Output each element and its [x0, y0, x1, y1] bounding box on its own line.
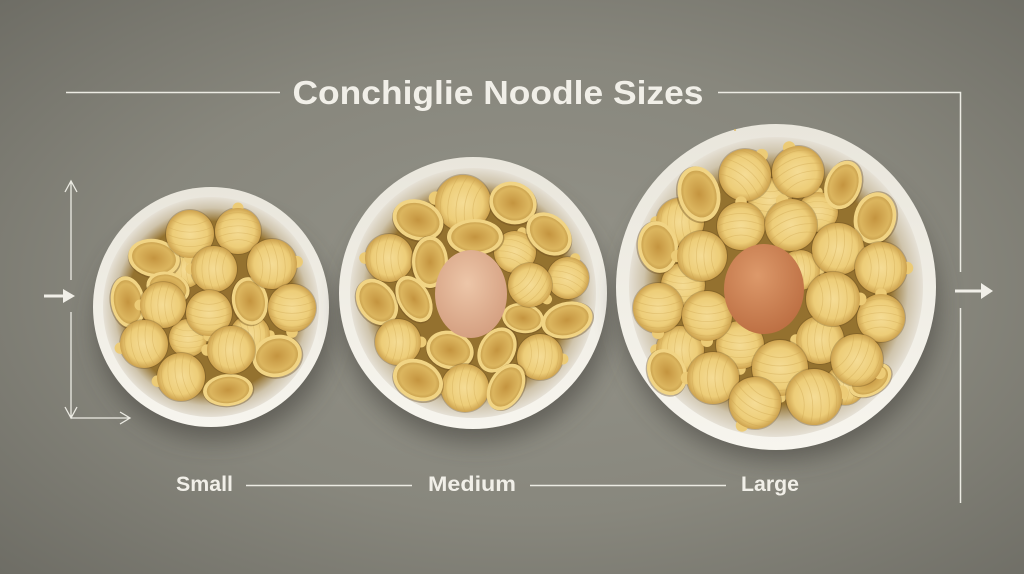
- label: Medium: Medium: [428, 473, 516, 496]
- large shells: [632, 129, 913, 444]
- bowl: medium: [339, 157, 610, 442]
- label: Small: Small: [176, 473, 233, 496]
- bowl: large: [616, 124, 939, 460]
- medium shells: [346, 168, 598, 418]
- egg: large bowl: [724, 244, 804, 334]
- large shell in front of egg: [805, 271, 866, 327]
- small shells: [105, 202, 317, 409]
- arrow: left pointer: [44, 289, 75, 303]
- egg: medium bowl: [435, 250, 507, 338]
- medium shell in front of egg: [498, 253, 566, 320]
- title: Conchiglie Noodle Sizes: [292, 74, 704, 111]
- bowl: small: [93, 187, 332, 440]
- label: Large: Large: [741, 473, 799, 496]
- arrow: right pointer: [955, 283, 993, 299]
- arrow: horizontal dimension: [71, 412, 130, 424]
- size scale connectors: [246, 484, 726, 486]
- vertical arrow: height dimension: [65, 181, 77, 418]
- title bracket line: [66, 92, 960, 503]
